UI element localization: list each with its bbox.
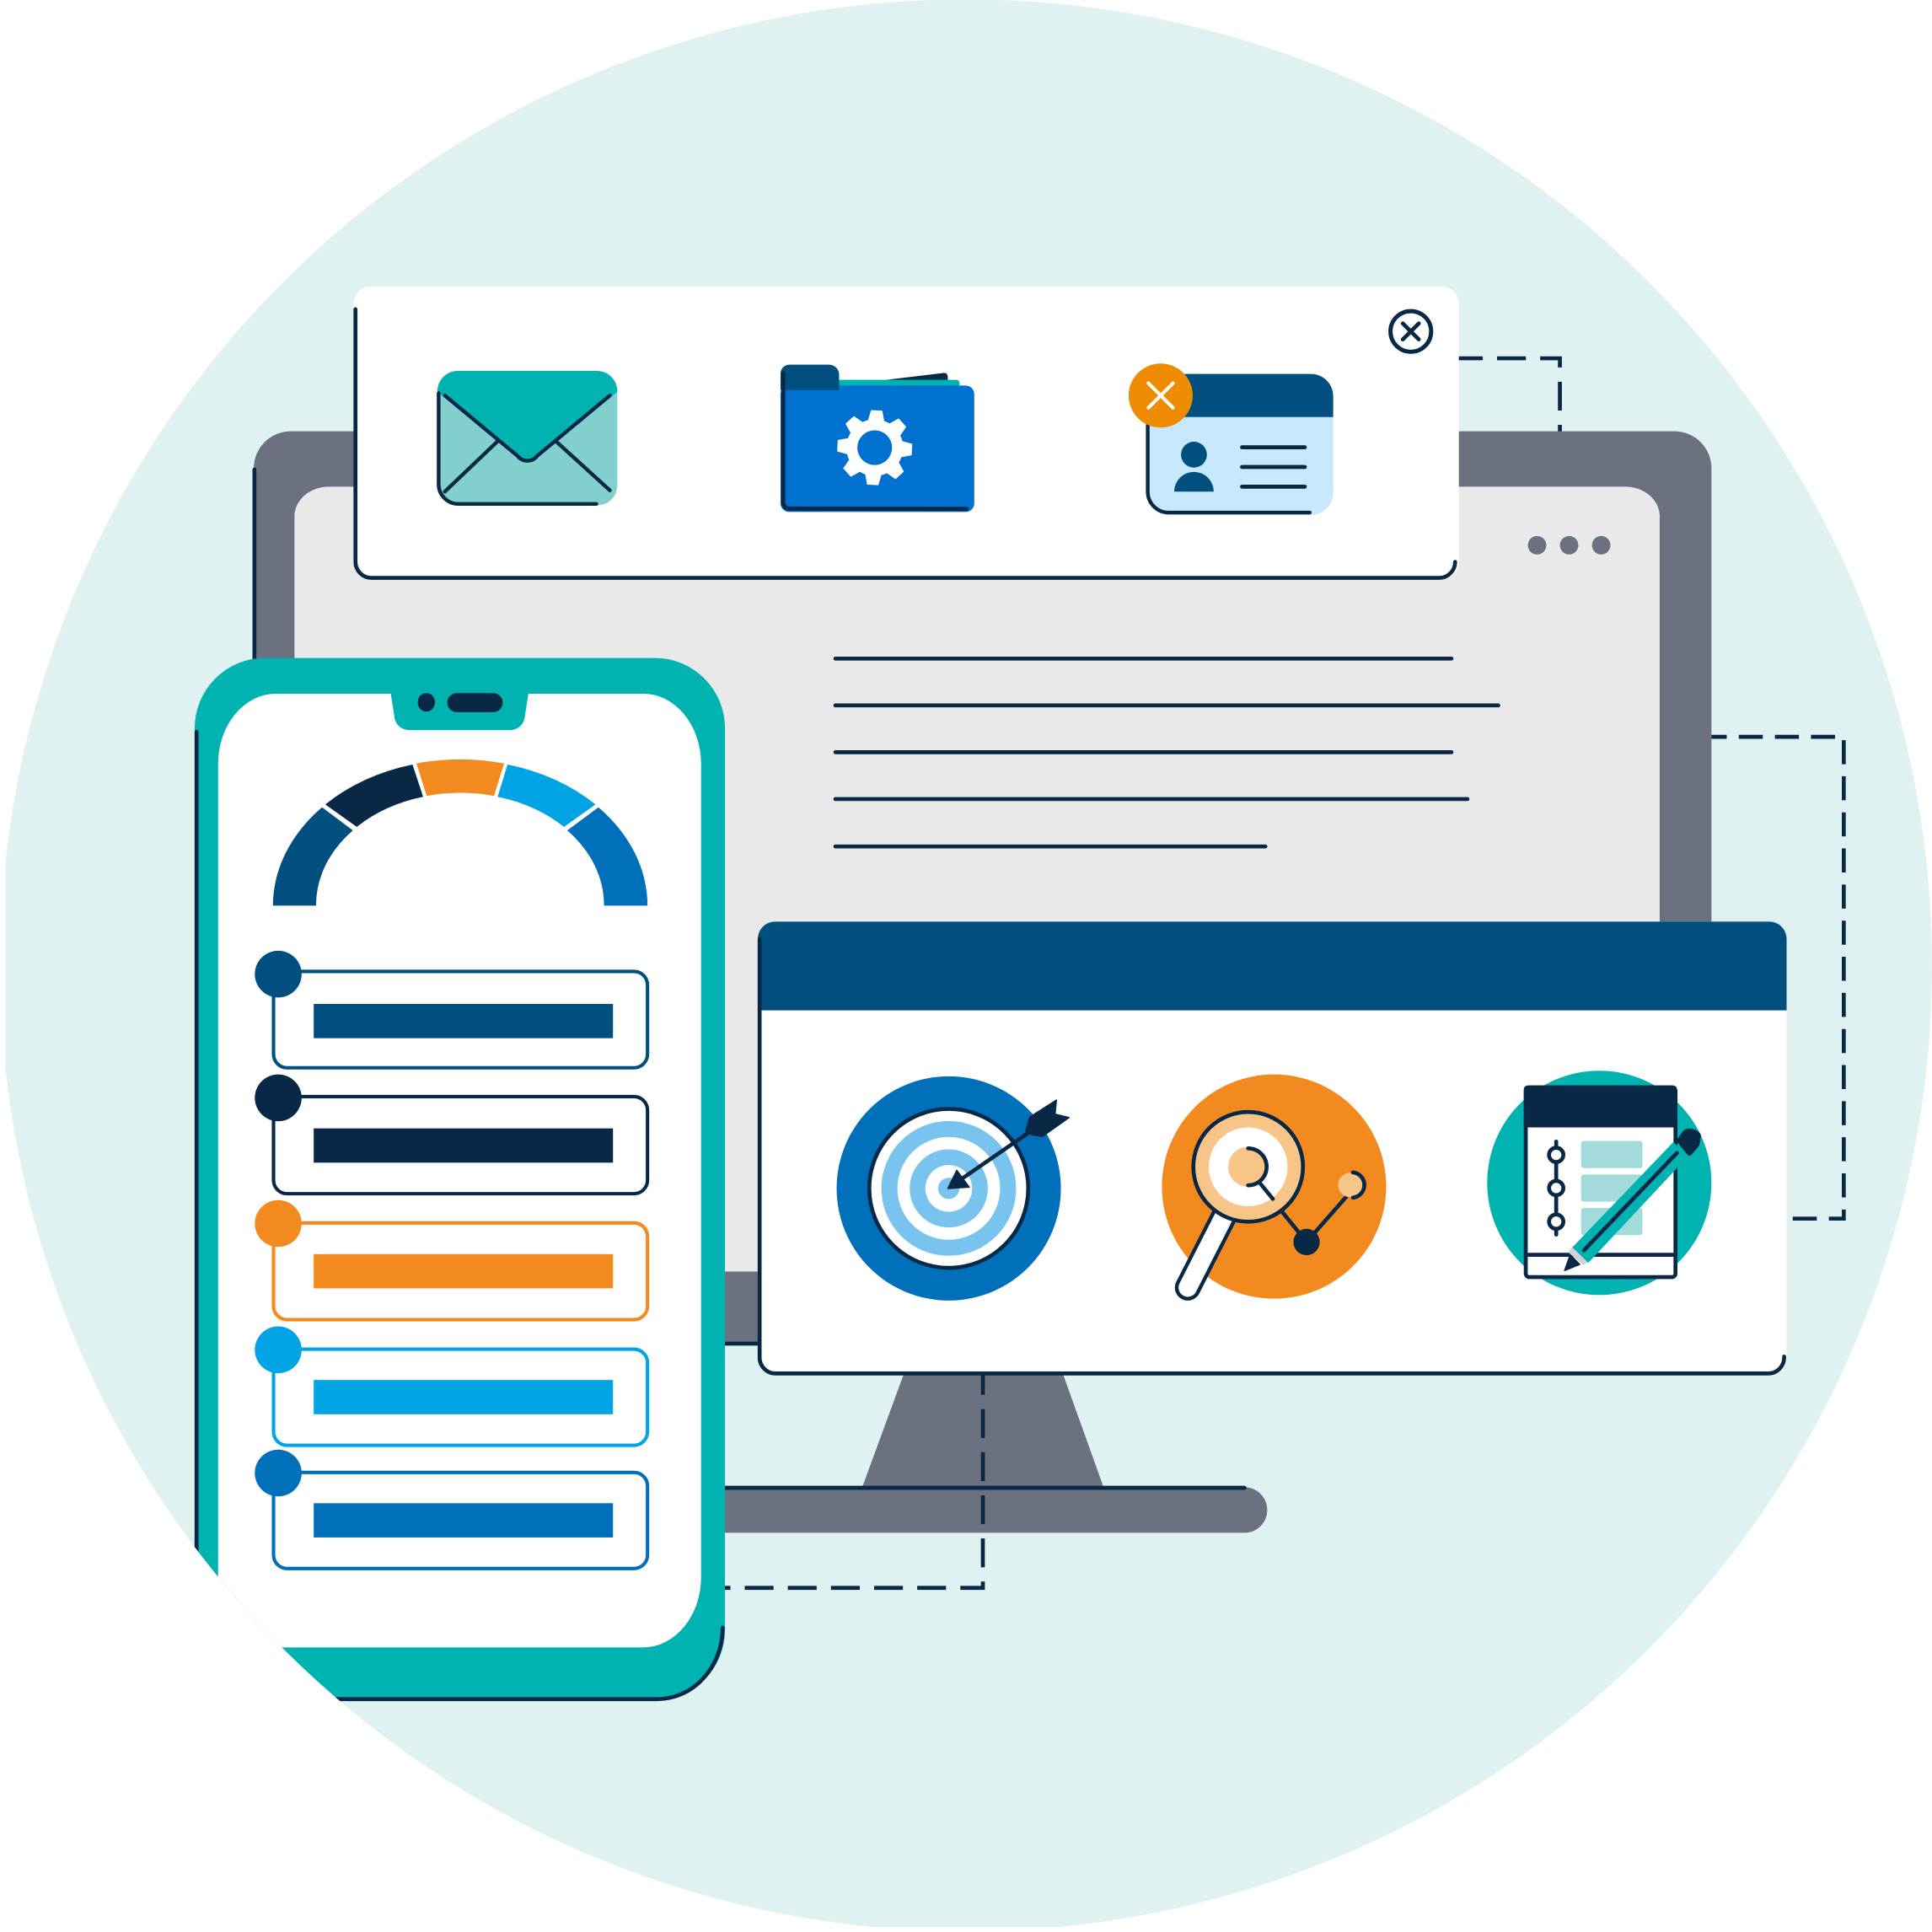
person: [1174, 442, 1214, 491]
checklist bullets: [1549, 1141, 1564, 1235]
icon: checklist with pencil: [1487, 1071, 1711, 1295]
monitor: [254, 432, 1711, 1532]
monitor base: [725, 1487, 1268, 1532]
icon: magnifier with chart: [1162, 1075, 1386, 1299]
icon: target with arrow: [837, 1076, 1069, 1301]
scene clipped to circle: [195, 287, 1843, 1700]
monitor stand: [861, 1375, 1104, 1489]
icon: id card: [1129, 363, 1334, 515]
dashed connector: top window to monitor: [1457, 358, 1560, 432]
top window: [354, 287, 1459, 579]
info lines: [1242, 448, 1305, 486]
icon: envelope: [437, 371, 617, 505]
window panel: [354, 287, 1459, 579]
monitor screen: [294, 486, 1660, 1272]
phone body: [195, 658, 725, 1700]
orange close badge: [1129, 363, 1193, 427]
list card 1: [255, 951, 647, 1068]
icon: close button: [1391, 311, 1431, 352]
gear: [837, 410, 912, 486]
icon: folder with gear: [781, 365, 974, 512]
checklist rows: [1581, 1141, 1642, 1235]
lower window: [758, 921, 1787, 1375]
list card 3: [255, 1200, 647, 1320]
pencil: [1564, 1129, 1701, 1270]
monitor body: [254, 432, 1711, 1343]
gauge chart: [273, 759, 647, 905]
phone screen: [218, 694, 701, 1647]
phone notch: [390, 692, 529, 730]
text lines: [835, 658, 1498, 846]
list card 4: [255, 1327, 647, 1446]
window panel: [758, 921, 1787, 1375]
dashed connector: monitor to lower window: [1711, 737, 1843, 1219]
dashed connector: lower window to phone: [725, 1375, 983, 1588]
window dots: [1528, 536, 1610, 555]
phone: [195, 658, 725, 1700]
window header: [758, 921, 1787, 1011]
list card 5: [255, 1450, 647, 1569]
list card 2: [255, 1075, 647, 1194]
